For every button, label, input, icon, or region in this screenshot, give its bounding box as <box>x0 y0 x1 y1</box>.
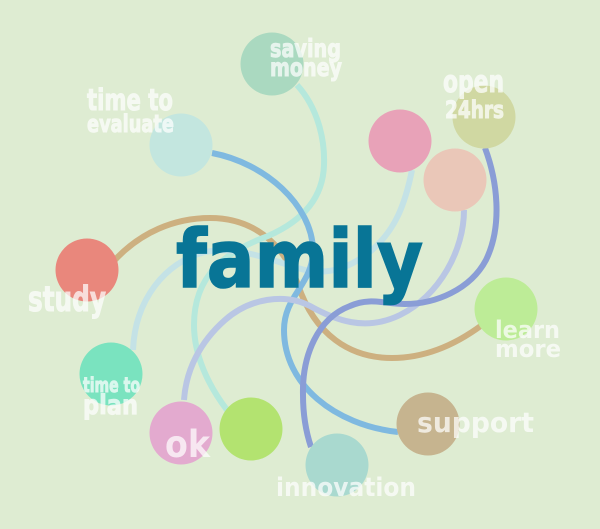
circle: open 24hrs <box>452 86 516 148</box>
circle: support <box>396 392 460 456</box>
circle: saving money <box>240 32 304 96</box>
curve: study to learn more <box>113 218 482 358</box>
circle: time to evaluate <box>150 114 212 176</box>
label: study: study <box>28 280 106 320</box>
label: ok: ok <box>165 423 211 466</box>
label: learn more: learn <box>495 316 560 344</box>
label: innovation: innovation <box>276 473 416 503</box>
circle: innovation <box>306 434 368 496</box>
label: time to evaluate: evaluate <box>87 110 174 138</box>
circle: pink <box>368 110 432 172</box>
label: learn more: more <box>495 335 561 363</box>
label: support: support <box>417 406 534 439</box>
label: time to evaluate: time to <box>87 83 173 117</box>
label: time to plan: plan <box>83 390 138 421</box>
circle: green <box>220 398 282 460</box>
circle: peach <box>424 148 486 212</box>
circles <box>56 32 538 496</box>
label: open 24hrs: open <box>443 65 504 100</box>
curve: time to evaluate to support <box>212 153 398 432</box>
label: time to plan: time to <box>83 373 140 397</box>
circle: time to plan <box>80 342 142 406</box>
label: open 24hrs <box>443 65 504 124</box>
curve: saving money to green circle <box>194 85 324 410</box>
label: saving money <box>270 34 342 82</box>
label: time to evaluate <box>87 83 174 138</box>
curve: peach circle to ok <box>184 210 464 400</box>
circle: learn more <box>474 278 538 340</box>
label: saving money: money <box>270 53 342 82</box>
label: time to plan <box>83 373 140 421</box>
connecting curves <box>113 85 497 447</box>
label: saving money: saving <box>270 34 341 63</box>
circle: study <box>56 238 118 302</box>
title: family <box>176 213 423 306</box>
label: learn more <box>495 316 561 363</box>
curve: open 24hrs to innovation <box>303 148 497 447</box>
circle: ok <box>150 402 212 464</box>
label: open 24hrs: 24hrs <box>445 96 504 124</box>
curve: pink circle to time to plan <box>133 170 412 350</box>
